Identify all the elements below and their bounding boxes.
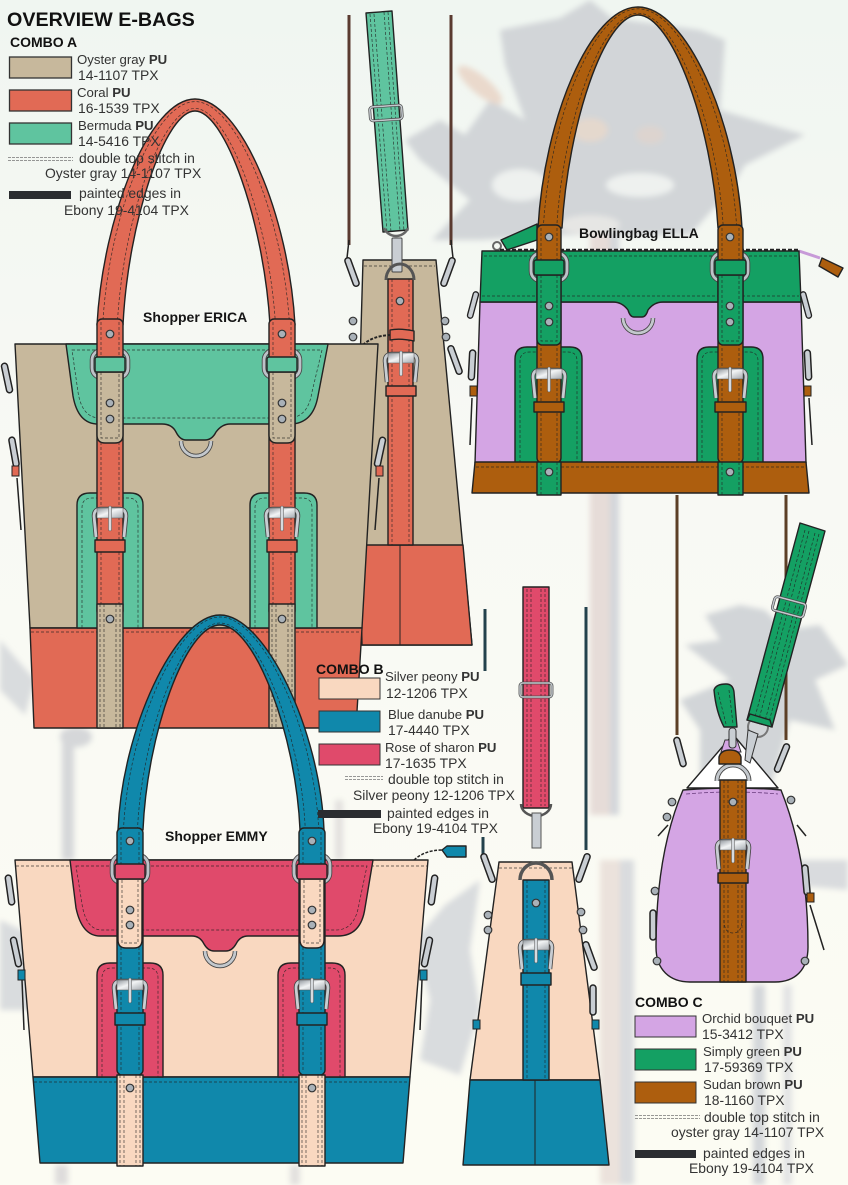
upper palm crown (405, 0, 805, 240)
legend: combo B: Silver peony 12-1206 TPX (353, 787, 515, 803)
pockets (515, 347, 763, 463)
legend: combo B: 17-1635 TPX (385, 755, 467, 771)
legend: combo A: painted edges in (79, 185, 181, 201)
bag body (475, 302, 806, 463)
legend: combo B: 12-1206 TPX (386, 685, 468, 701)
bag body (15, 344, 378, 628)
legend: combo A: Bermuda PU (78, 118, 154, 133)
bottom panel (33, 1077, 410, 1163)
legend: combo A: Oyster gray PU (77, 52, 167, 67)
legend: combo B: double top stitch in (388, 771, 504, 787)
legend: combo C: 17-59369 TPX (704, 1059, 793, 1075)
legend: combo A: Coral PU (77, 85, 131, 100)
zip pull (414, 846, 466, 860)
handle (118, 615, 324, 830)
pockets (97, 963, 345, 1077)
title: OVERVIEW E-BAGS (7, 9, 195, 31)
legend: combo C (635, 994, 824, 1176)
legend: combo A: double top stitch in (79, 150, 195, 166)
legend: combo C: painted edges in (703, 1145, 805, 1161)
legend: combo C: Ebony 19-4104 TPX (689, 1160, 814, 1176)
legend: combo C: oyster gray 14-1107 TPX (671, 1124, 824, 1140)
side hardware (1, 363, 386, 530)
zip pulls (493, 224, 843, 277)
legend: combo B: COMBO B (316, 661, 384, 677)
right strap (294, 828, 330, 1166)
handle (538, 7, 742, 228)
legend: combo B: painted edges in (387, 805, 489, 821)
left strap (112, 828, 148, 1166)
left strap (92, 319, 128, 728)
upper palm trunk (590, 215, 612, 815)
bottom panel (472, 462, 809, 493)
legend: combo C: double top stitch in (704, 1109, 820, 1125)
side view: Shopper ERICA (344, 11, 472, 645)
left palm pieces (0, 640, 35, 715)
legend: combo C: Orchid bouquet PU (702, 1011, 814, 1026)
legend: combo B: 17-4440 TPX (388, 722, 470, 738)
legend: combo A: COMBO A (10, 34, 77, 50)
legend: combo C: COMBO C (635, 994, 703, 1010)
bag body (15, 860, 428, 1077)
side view: Shopper EMMY (463, 587, 609, 1165)
flap (70, 860, 373, 966)
legend: combo B: Silver peony PU (385, 669, 480, 684)
side hardware (467, 291, 812, 445)
legend: combo A: Oyster gray 14-1107 TPX (45, 165, 201, 181)
legend: combo A: 14-1107 TPX (78, 67, 159, 83)
label: Shopper ERICA: Shopper ERICA (143, 309, 247, 325)
lower palm pieces (415, 880, 480, 1075)
legend: combo B: Rose of sharon PU (385, 740, 496, 755)
left strap (531, 225, 567, 495)
top panel (480, 250, 801, 333)
legend: combo A: 14-5416 TPX (78, 133, 160, 149)
side hardware (5, 875, 438, 1030)
front view: Shopper ERICA (1, 99, 386, 728)
right strap (712, 225, 748, 495)
front view: Shopper EMMY (5, 615, 466, 1166)
bottom panel (30, 628, 362, 728)
right strap (264, 319, 300, 728)
legend: combo B (316, 661, 515, 836)
label: Bowlingbag ELLA: Bowlingbag ELLA (579, 225, 699, 241)
legend: combo A (8, 34, 201, 218)
lower right palm crown (680, 605, 848, 790)
legend: combo A: 16-1539 TPX (78, 100, 160, 116)
legend: combo C: 15-3412 TPX (702, 1026, 784, 1042)
flap (66, 344, 328, 456)
legend: combo C: 18-1160 TPX (704, 1092, 785, 1108)
handle (97, 99, 295, 325)
legend: combo C: Simply green PU (703, 1044, 802, 1059)
front view: Bowlingbag ELLA (467, 7, 843, 495)
pockets (77, 493, 317, 628)
legend: combo B: Ebony 19-4104 TPX (373, 820, 498, 836)
legend: combo C: Sudan brown PU (703, 1077, 803, 1092)
legend: combo A: Ebony 19-4104 TPX (64, 202, 189, 218)
label: Shopper EMMY: Shopper EMMY (165, 828, 268, 844)
legend: combo B: Blue danube PU (388, 707, 484, 722)
side view: Bowlingbag ELLA (650, 495, 825, 982)
